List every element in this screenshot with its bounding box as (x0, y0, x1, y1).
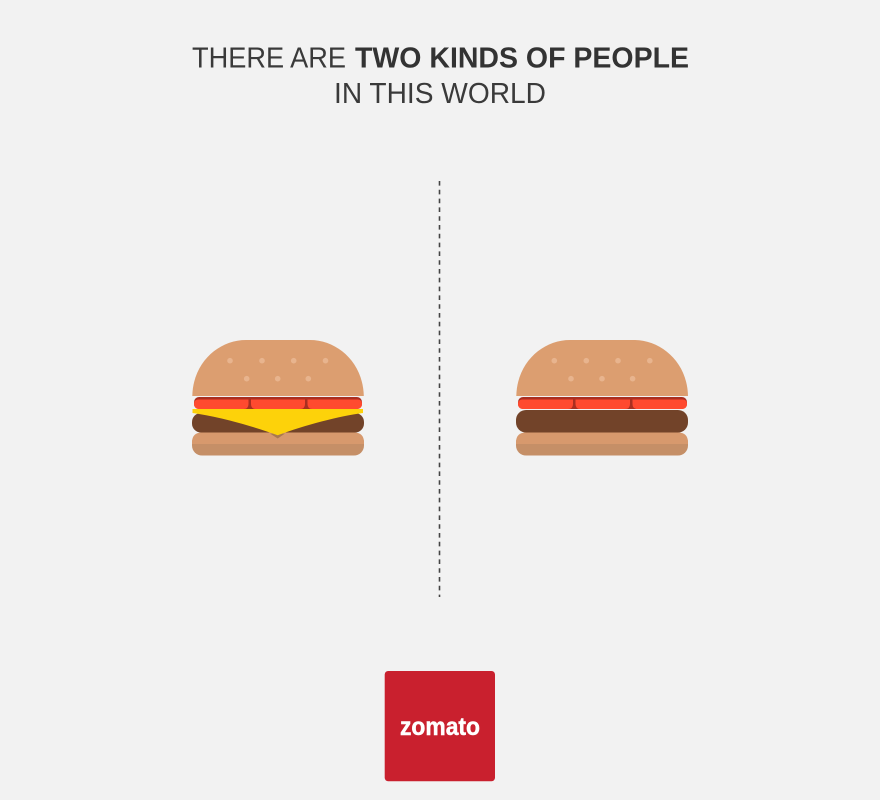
top bun (192, 340, 364, 396)
title (192, 42, 689, 110)
zomato logo (385, 671, 495, 781)
dashed divider (438, 181, 440, 597)
burger: with cheese (192, 340, 364, 456)
title line 1: TWO KINDS OF PEOPLE (355, 42, 689, 74)
logo tile (385, 671, 495, 781)
title line 1 (192, 42, 689, 74)
burger: without cheese (516, 340, 688, 456)
top bun (516, 340, 688, 396)
bottom bun (516, 432, 688, 456)
tomato slices (518, 397, 687, 409)
patty (192, 413, 364, 432)
sesame seeds (227, 358, 328, 382)
sesame seeds (552, 358, 653, 382)
tomato slices (194, 397, 362, 409)
bottom bun (192, 432, 364, 456)
logo wordmark: zomato (400, 713, 480, 741)
title line 2: IN THIS WORLD (334, 78, 546, 110)
patty (516, 410, 688, 432)
title line 1: THERE ARE (192, 42, 346, 74)
cheese (192, 409, 363, 438)
